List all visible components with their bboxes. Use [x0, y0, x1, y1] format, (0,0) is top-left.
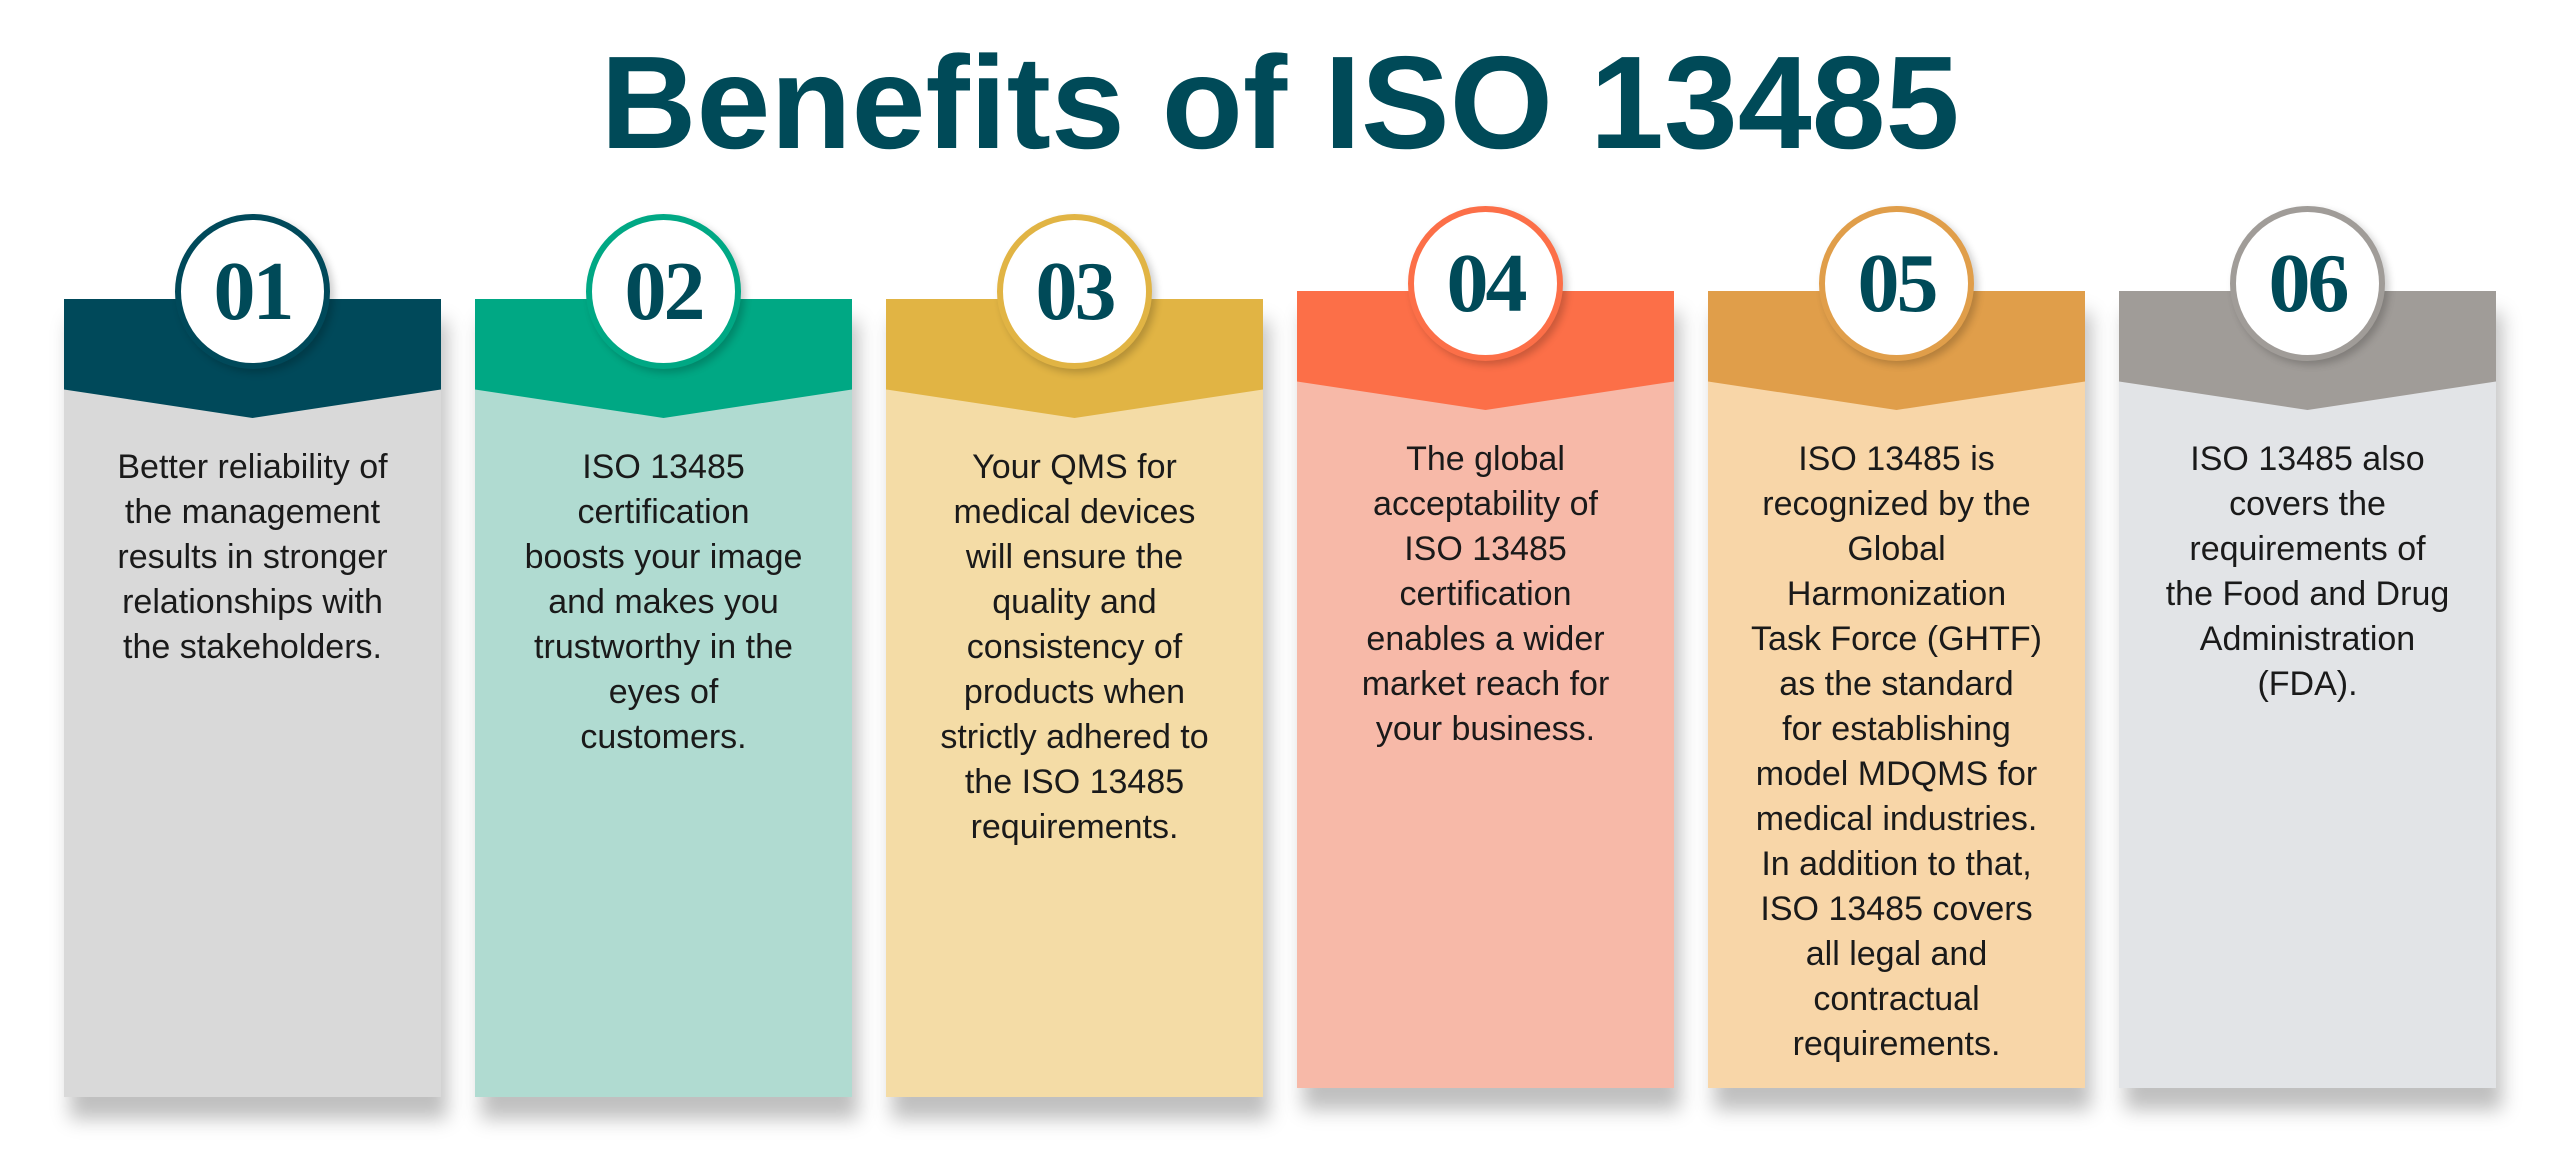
panel: 02 [470, 214, 868, 1130]
text 02: certification [578, 493, 749, 531]
text 04: certification [1400, 575, 1571, 613]
text 06: requirements of [2189, 530, 2426, 568]
text 01: Better reliability of [117, 448, 388, 486]
text 02 [525, 448, 802, 756]
text 02: and makes you [548, 583, 779, 621]
text 05 [1751, 440, 2042, 1063]
text 05: all legal and [1806, 935, 1987, 973]
text 03: products when [964, 673, 1185, 711]
text 03: consistency of [967, 628, 1182, 666]
text 05: In addition to that, [1761, 845, 2032, 883]
number 05: 05 [1858, 237, 1936, 330]
text 01 [117, 448, 388, 666]
text 05: medical industries. [1756, 800, 2037, 838]
text 06: the Food and Drug [2166, 575, 2449, 613]
text 04: market reach for [1362, 665, 1609, 703]
text 03: requirements. [971, 808, 1178, 846]
text 01: the stakeholders. [123, 628, 382, 666]
text 04: enables a wider [1366, 620, 1605, 658]
text 03: strictly adhered to [940, 718, 1209, 756]
text 04 [1362, 440, 1609, 748]
text 03 [940, 448, 1209, 846]
text 06: ISO 13485 also [2190, 440, 2425, 478]
text 02: ISO 13485 [582, 448, 745, 486]
number 04: 04 [1446, 237, 1524, 330]
text 01: the management [125, 493, 380, 531]
text 05: contractual [1813, 980, 1980, 1018]
panel: 03 [882, 214, 1280, 1130]
text 06: (FDA). [2257, 665, 2358, 703]
text 05: requirements. [1793, 1025, 2000, 1063]
text 04: ISO 13485 [1404, 530, 1567, 568]
number 06 [2230, 206, 2385, 361]
title: Benefits of ISO 13485 [600, 29, 1960, 176]
panel: 01 [60, 214, 458, 1130]
text 05: model MDQMS for [1756, 755, 2037, 793]
text 03: quality and [992, 583, 1157, 621]
number 02: 02 [624, 245, 702, 338]
text 01: results in stronger [117, 538, 388, 576]
text 05: Task Force (GHTF) [1751, 620, 2042, 658]
text 05: as the standard [1779, 665, 2014, 703]
text 06: Administration [2200, 620, 2415, 658]
text 05: ISO 13485 covers [1760, 890, 2033, 928]
number 01: 01 [214, 245, 292, 338]
text 05: Global [1847, 530, 1946, 568]
text 02: trustworthy in the [534, 628, 793, 666]
text 04: acceptability of [1373, 485, 1598, 523]
number 02 [586, 214, 741, 369]
text 04: your business. [1376, 710, 1595, 748]
text 05: for establishing [1782, 710, 2011, 748]
text 02: eyes of [609, 673, 718, 711]
text 06: covers the [2229, 485, 2386, 523]
text 05: ISO 13485 is [1798, 440, 1995, 478]
text 05: recognized by the [1762, 485, 2031, 523]
text 06 [2166, 440, 2449, 703]
number 06: 06 [2268, 237, 2346, 330]
number 01 [175, 214, 330, 369]
panel: 06 [2114, 206, 2512, 1120]
text 03: medical devices [954, 493, 1195, 531]
panel: 05 [1704, 206, 2102, 1120]
text 05: Harmonization [1787, 575, 2006, 613]
text 03: Your QMS for [972, 448, 1177, 486]
text 02: customers. [580, 718, 747, 756]
number 03: 03 [1036, 245, 1114, 338]
number 03 [997, 214, 1152, 369]
panel: 04 [1292, 206, 1690, 1120]
text 03: will ensure the [966, 538, 1183, 576]
text 02: boosts your image [525, 538, 802, 576]
number 04 [1408, 206, 1563, 361]
number 05 [1819, 206, 1974, 361]
text 04: The global [1406, 440, 1565, 478]
text 03: the ISO 13485 [965, 763, 1184, 801]
text 01: relationships with [122, 583, 383, 621]
